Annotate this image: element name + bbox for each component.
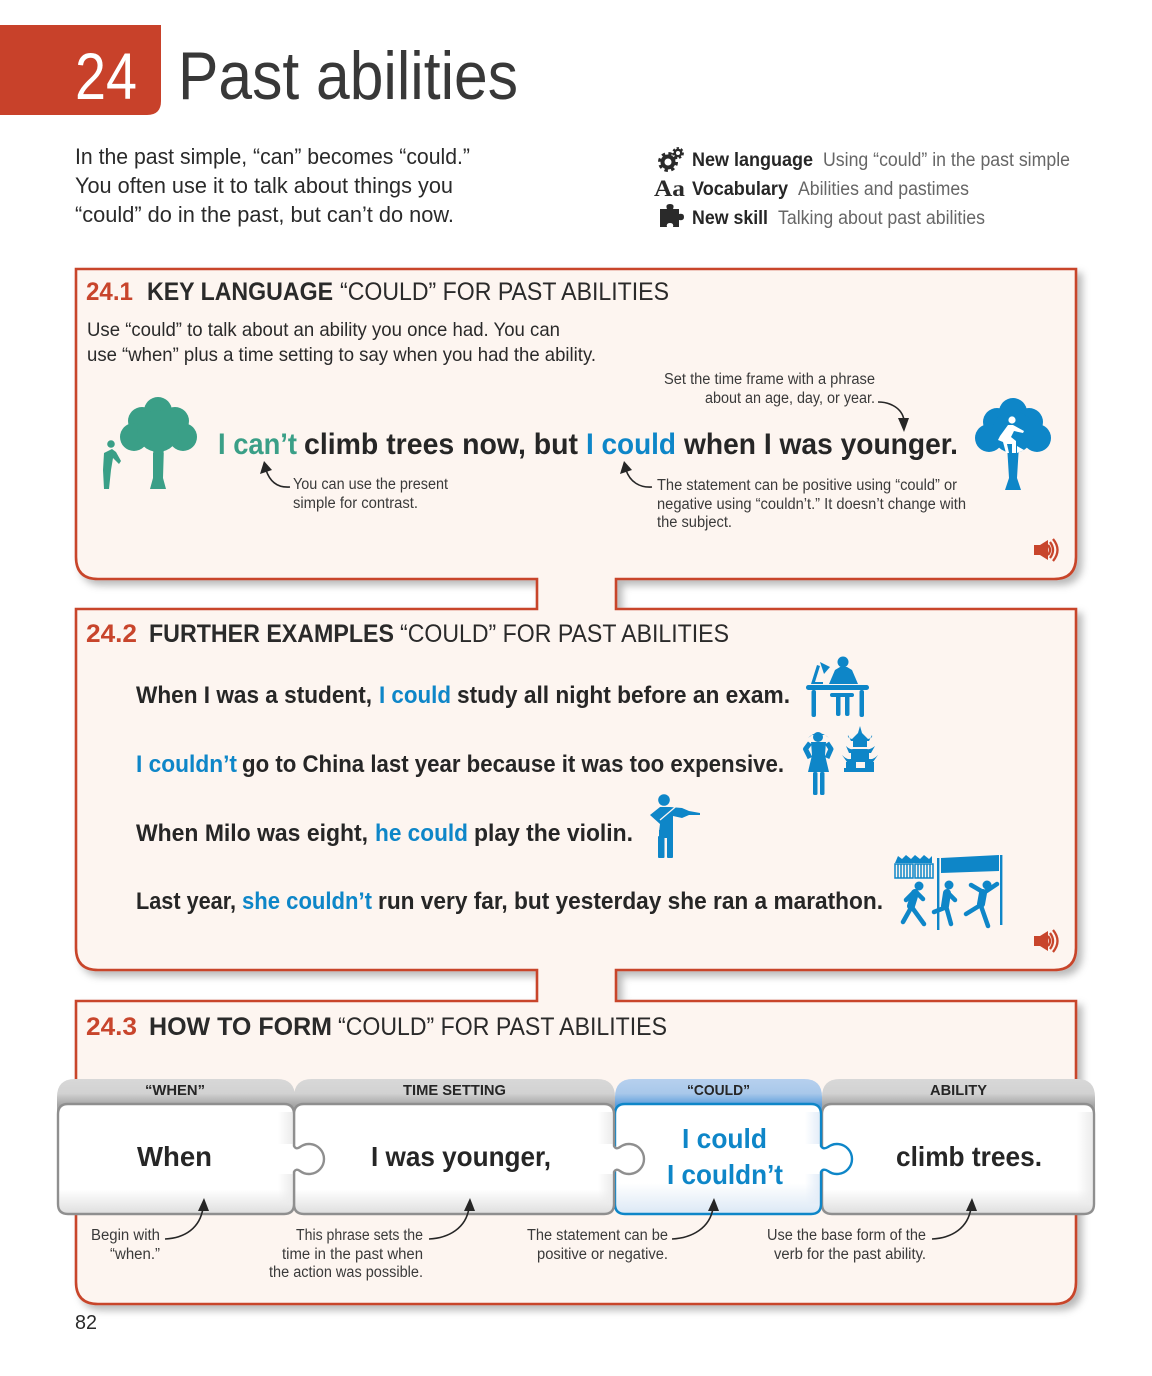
sentence: main example: climb trees now, but [304,428,578,461]
note: time phrase: time in the past when [282,1246,423,1263]
example sentence 3: he could [375,820,468,847]
page number: 82 [75,1312,97,1334]
heading 24.1: “COULD” FOR PAST ABILITIES [340,278,669,306]
annotation: time frame: Set the time frame with a phrase [664,371,875,388]
intro text: You often use it to talk about things you [75,173,453,198]
example sentence 4: run very far, but yesterday she ran a marathon. [378,888,883,915]
sentence: main example: I can’t [218,428,297,461]
tab: ability [822,1079,1095,1115]
example sentence 4: she couldn’t [242,888,372,915]
new language: Using “could” in the past simple [823,150,1070,171]
heading 24.1: KEY LANGUAGE [147,278,333,306]
new skill [692,208,985,229]
tab: could [615,1079,822,1115]
arrow: positive or negative [620,461,652,487]
panel: 24.2 further examples [86,620,1058,952]
intro text [75,144,470,227]
example sentence 1 [136,682,790,709]
sentence: main example: when I was younger. [683,428,958,461]
heading 24.3 [86,1013,667,1041]
note: begin with when [91,1227,160,1263]
tab: time setting [294,1079,615,1115]
annotation: time frame [664,371,875,407]
heading 24.3: HOW TO FORM [149,1013,332,1041]
icon: speaker [1034,930,1058,952]
icon: Aa: Aa [654,176,686,201]
intro text: In the past simple, “can” becomes “could.” [75,144,470,169]
new skill: Talking about past abilities [778,208,985,229]
note: positive or negative [657,477,966,531]
icon: gears [660,148,683,170]
note: positive or negative: The statement can be positive using “could” or [657,477,957,494]
tab: ability: ABILITY [930,1082,987,1099]
note: begin with when: Begin with [91,1227,160,1244]
note: time phrase: the action was possible. [269,1264,423,1281]
new skill: New skill [692,208,768,229]
puzzle piece: could: I could [682,1123,767,1154]
panel: 24.3 how to form [57,1013,1095,1281]
icon: girl and pagoda [806,726,878,795]
arrow: time frame [878,402,909,432]
panel: 24.1 key language [86,278,1058,561]
icon: marathon finish [895,855,1002,930]
example sentence 3: play the violin. [474,820,633,847]
chapter number tab: 24 [75,39,137,113]
icon: puzzle piece [660,204,684,227]
heading 24.3: 24.3 [86,1013,137,1041]
panel outline: connected panels [76,269,1076,1304]
note: positive or negative [527,1227,668,1263]
note: positive or negative: positive or negative. [537,1246,668,1263]
puzzle piece: time setting [294,1104,644,1214]
example sentence 2: I couldn’t [136,751,237,778]
arrow: time setting [429,1198,475,1239]
tab: time setting: TIME SETTING [403,1082,506,1099]
vocabulary: Vocabulary [692,179,788,200]
heading 24.3: “COULD” FOR PAST ABILITIES [338,1013,667,1041]
example sentence 4: Last year, [136,888,236,915]
body text: use “when” plus a time setting to say when you had the ability. [87,344,596,366]
note: present simple: You can use the present [293,476,449,493]
icon: speaker [1034,539,1058,561]
new language: New language [692,150,813,171]
note: present simple: simple for contrast. [293,495,418,512]
arrow: ability [932,1198,977,1239]
note: positive or negative: negative using “couldn’t.” It doesn’t change with [657,496,966,513]
example sentence 1: When I was a student, [136,682,372,709]
icon: violinist [650,794,700,858]
example sentence 3 [136,820,633,847]
vocabulary: Abilities and pastimes [798,179,969,200]
note: base form: Use the base form of the [767,1227,926,1244]
puzzle piece: could: I couldn’t [667,1159,783,1190]
example sentence 2: go to China last year because it was too expensive. [242,751,784,778]
example sentence 4 [136,888,883,915]
note: time phrase: This phrase sets the [296,1227,423,1244]
chapter number tab [0,25,161,115]
heading 24.1: 24.1 [86,278,133,306]
tab: could: “COULD” [687,1082,750,1099]
puzzle piece: when: When [137,1141,212,1172]
note: positive or negative: The statement can be [527,1227,668,1244]
icon: person beneath tree [103,397,197,489]
note: time phrase [269,1227,423,1281]
new language [692,150,1070,171]
heading 24.2: FURTHER EXAMPLES [149,620,394,648]
puzzle piece: ability [822,1104,1094,1214]
puzzle piece: when [58,1104,324,1214]
icon: student at desk [806,656,869,717]
arrow: present simple [260,461,290,487]
puzzle piece: time setting: I was younger, [371,1141,551,1172]
puzzle piece: could [615,1104,852,1214]
heading 24.1 [86,278,669,306]
example sentence 1: I could [379,682,451,709]
puzzle diagram [57,1079,1095,1214]
annotation: time frame: about an age, day, or year. [705,390,875,407]
vocabulary [692,179,969,200]
heading 24.2: 24.2 [86,620,137,648]
arrow: could [672,1198,719,1239]
note: present simple [293,476,449,512]
arrow: when [165,1198,209,1239]
tab: when: “WHEN” [145,1082,205,1099]
puzzle piece: ability: climb trees. [896,1141,1042,1172]
note: begin with when: “when.” [110,1246,160,1263]
learning goals [654,148,1070,229]
sentence: main example [218,428,958,461]
intro text: “could” do in the past, but can’t do now. [75,202,454,227]
title: Past abilities [178,38,518,114]
heading 24.2: “COULD” FOR PAST ABILITIES [400,620,729,648]
tab: when [57,1079,295,1115]
heading 24.2 [86,620,729,648]
body text [87,319,596,366]
note: base form [767,1227,926,1263]
example sentence 3: When Milo was eight, [136,820,368,847]
note: base form: verb for the past ability. [774,1246,926,1263]
sentence: main example: I could [586,428,676,461]
example sentence 1: study all night before an exam. [457,682,790,709]
body text: Use “could” to talk about an ability you once had. You can [87,319,560,341]
note: positive or negative: the subject. [657,514,732,531]
icon: person climbing tree [975,398,1051,490]
